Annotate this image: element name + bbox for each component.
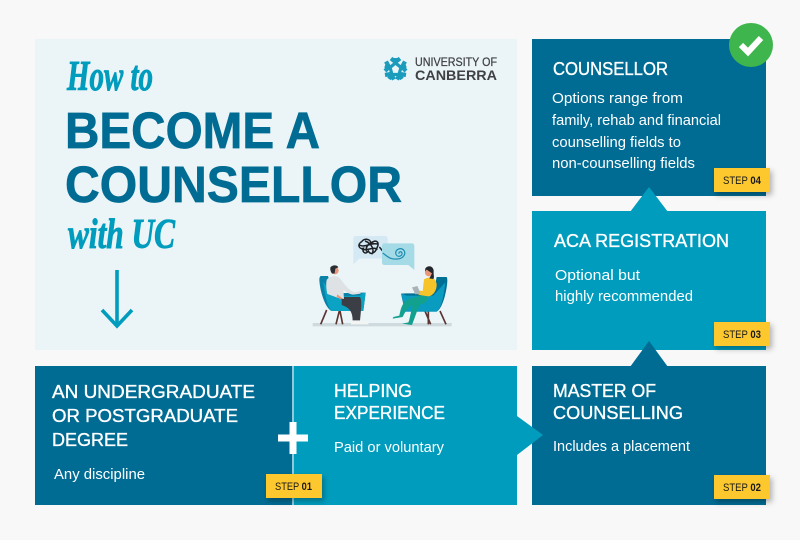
panel: step 02 master of counselling: COUNSELLING <box>553 403 683 423</box>
badge: step 04: STEP 04 <box>723 175 762 187</box>
panel: step 01 helping experience: EXPERIENCE <box>334 403 445 423</box>
panel: step 04 counsellor <box>532 39 766 196</box>
badge: step 02 <box>714 475 770 499</box>
illustration: man in armchair <box>319 265 369 324</box>
badge: step 03: STEP 03 <box>723 329 761 341</box>
badge: step 03 <box>714 322 770 346</box>
panel: step 01 degree: DEGREE <box>52 430 128 450</box>
logo: University of Canberra <box>385 55 497 83</box>
badge: step 01: STEP 01 <box>275 481 312 493</box>
icon: plus <box>278 422 308 454</box>
panel: step 01 degree: AN UNDERGRADUATE <box>52 382 255 402</box>
title: Become a Counsellor: BECOME A <box>65 102 320 159</box>
panel: step 01 degree <box>35 366 293 505</box>
title: Become a Counsellor <box>65 102 402 213</box>
panel: step 02 master of counselling: MASTER OF <box>553 381 656 401</box>
panel: step 01 degree: Any discipline <box>54 466 145 483</box>
badge: step 04 <box>714 168 770 192</box>
title: Become a Counsellor: COUNSELLOR <box>65 156 402 213</box>
illustration: counselling session <box>313 236 452 326</box>
badge: step 02: STEP 02 <box>723 482 761 494</box>
icon: spiral speech bubble <box>382 243 414 270</box>
logo: University of Canberra: UNIVERSITY OF <box>415 55 497 69</box>
illustration: woman in armchair <box>393 266 447 325</box>
panel: step 01 helping experience: Paid or voluntary <box>334 439 444 456</box>
icon: tangled speech bubble <box>353 236 391 264</box>
panel: step 03 ACA registration: ACA REGISTRATION <box>554 231 729 251</box>
panel: step 04 counsellor: non-counselling fields <box>552 155 695 172</box>
panel: step 04 counsellor: family, rehab and financial <box>552 112 721 129</box>
panel: step 01 helping experience <box>293 366 543 505</box>
panel: step 03 ACA registration <box>532 187 766 350</box>
heading: How to: How to <box>66 54 153 100</box>
heading: with UC: with UC <box>68 212 176 258</box>
logo: University of Canberra: CANBERRA <box>415 67 497 83</box>
panel: step 01 degree: OR POSTGRADUATE <box>52 406 238 426</box>
icon: university snowflake logo <box>385 58 406 80</box>
panel: hero <box>35 39 517 350</box>
panel: step 02 master of counselling <box>532 341 766 505</box>
panel: step 03 ACA registration: Optional but <box>555 267 641 284</box>
icon: green check badge <box>729 23 773 67</box>
panel: step 03 ACA registration: highly recommended <box>555 288 693 305</box>
panel: step 04 counsellor: Options range from <box>552 90 683 107</box>
panel: step 01 helping experience: HELPING <box>334 381 412 401</box>
panel: step 02 master of counselling: Includes a placement <box>553 438 691 455</box>
badge: step 01 <box>266 474 322 498</box>
panel: step 04 counsellor: COUNSELLOR <box>553 59 668 79</box>
icon: down arrow <box>102 270 132 326</box>
panel: step 04 counsellor: counselling fields to <box>552 134 681 151</box>
